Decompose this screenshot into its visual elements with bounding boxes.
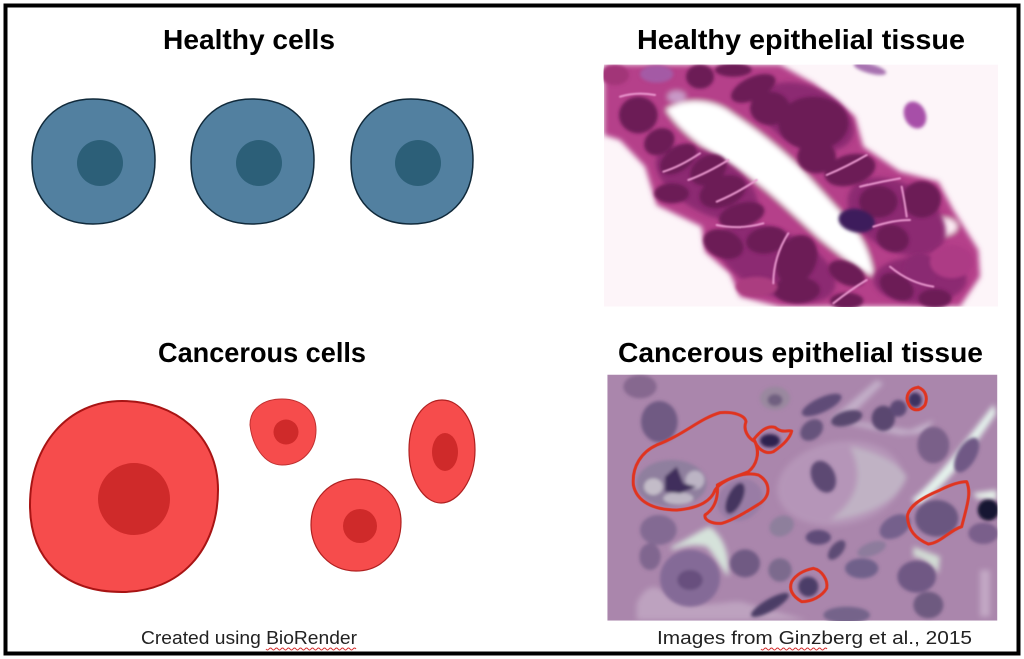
tissue band [604,65,980,307]
heading: Cancerous cells: Cancerous cells [158,337,366,368]
cell borders [620,94,933,303]
healthy cell 1 [32,99,155,224]
caption: Images from Ginzberg et al., 2015: Images from Ginzberg et al., 2015 [657,628,972,648]
photo: cancerous epithelial tissue [607,375,999,623]
cancerous cell: small round [250,399,316,465]
cancerous cell: large [30,401,218,592]
nuclei [623,375,999,623]
healthy cell 3 [351,99,473,224]
caption: Created using BioRender: Created using BioRender [141,628,357,648]
cancerous cell: oval [409,400,475,503]
heading: Healthy epithelial tissue: Healthy epithelial tissue [637,24,965,55]
red outlines [633,387,969,602]
heading: Cancerous epithelial tissue: Cancerous epithelial tissue [618,337,983,368]
photo: healthy epithelial tissue [601,60,998,319]
cancerous cell: medium [311,479,401,571]
healthy cell 2 [191,99,314,224]
stroma and pale gaps [637,380,997,620]
nuclei [601,60,973,309]
cytoplasm shading [654,80,968,307]
heading: Healthy cells: Healthy cells [163,24,335,55]
